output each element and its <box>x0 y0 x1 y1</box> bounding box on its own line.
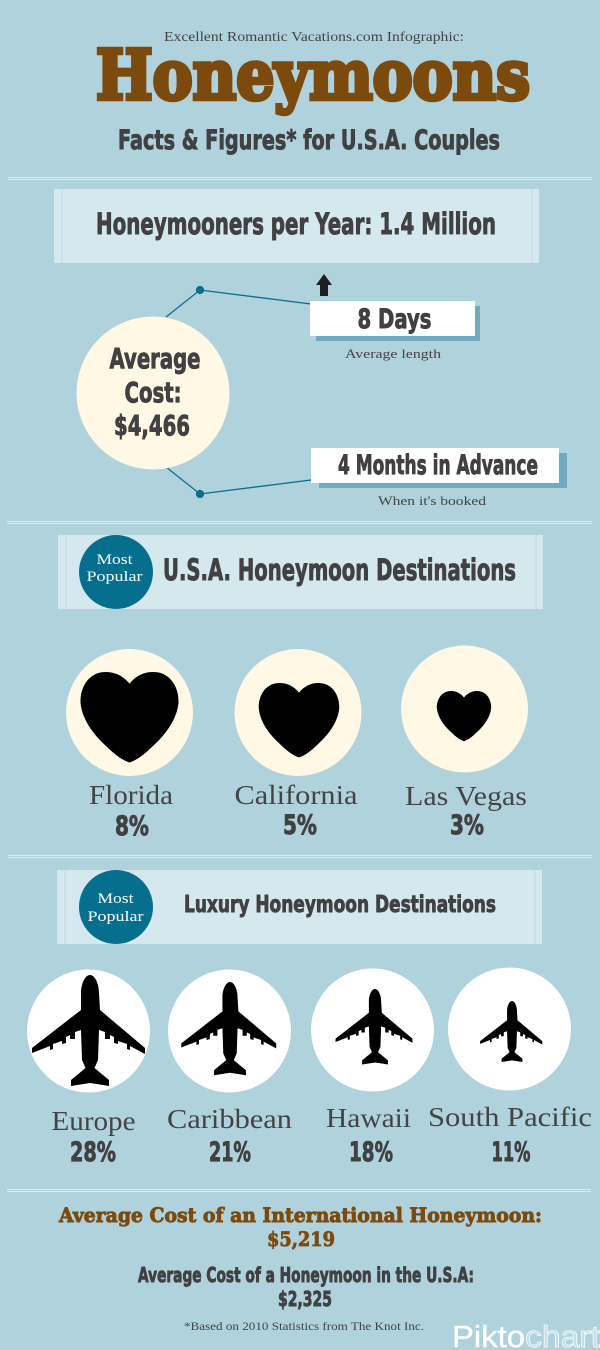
destination: South Pacific: 11% <box>492 1137 530 1168</box>
destination: Europe: Europe <box>52 1106 136 1136</box>
circle: average cost <box>76 316 230 470</box>
badge: most popular: Most <box>96 552 132 568</box>
destination: Florida <box>66 649 193 842</box>
circle: average cost: $4,466 <box>114 409 190 442</box>
international cost <box>58 1203 542 1251</box>
destination: Hawaii: 18% <box>349 1137 393 1168</box>
badge: most popular <box>79 870 153 944</box>
panel: luxury destinations heading <box>57 870 542 944</box>
badge: most popular: Most <box>98 891 134 907</box>
badge: most popular: Popular <box>88 909 144 925</box>
domestic cost <box>138 1263 474 1311</box>
callout: 8 days: Average length <box>345 347 442 361</box>
destination: Florida: 8% <box>115 811 149 842</box>
callout: 8 days: 8 Days <box>358 304 432 335</box>
icon: up arrow <box>316 274 332 296</box>
destination: California: California <box>234 780 358 810</box>
destination: California <box>234 649 362 841</box>
destination: Hawaii <box>311 968 434 1168</box>
international cost: $5,219 <box>267 1227 335 1251</box>
callout: 4 months in advance <box>311 448 567 508</box>
badge: most popular: Popular <box>86 569 143 585</box>
destination: Florida: Florida <box>89 780 173 810</box>
destination: Las Vegas <box>401 646 528 841</box>
international cost: Average Cost of an International Honeymoon: <box>58 1203 542 1227</box>
destination: Hawaii: Hawaii <box>326 1103 411 1133</box>
callout: 4 months in advance: When it's booked <box>378 494 487 508</box>
destination: South Pacific: South Pacific <box>428 1102 592 1132</box>
destination: Las Vegas: Las Vegas <box>405 781 527 811</box>
panel: U.S.A. destinations heading <box>58 535 543 609</box>
diagram: average cost connectors <box>166 286 311 498</box>
destination: Caribbean <box>167 970 293 1168</box>
header <box>96 30 530 156</box>
callout: 8 days <box>310 301 480 361</box>
destination: California: 5% <box>283 810 317 841</box>
domestic cost: $2,325 <box>278 1287 332 1311</box>
circle: average cost: Cost: <box>124 376 182 409</box>
badge: most popular <box>79 535 153 609</box>
footnote: *Based on 2010 Statistics from The Knot Inc. <box>184 1321 424 1333</box>
destination: South Pacific <box>428 968 592 1168</box>
logo: Piktochart <box>452 1319 600 1350</box>
destination: Las Vegas: 3% <box>450 810 484 841</box>
destination: Caribbean: 21% <box>209 1137 251 1168</box>
source line: Excellent Romantic Vacations.com Infographic: <box>164 30 464 45</box>
panel: luxury destinations heading: Luxury Honeymoon Destinations <box>184 892 496 918</box>
title: Honeymoons <box>96 36 530 116</box>
destination: Caribbean: Caribbean <box>167 1104 293 1134</box>
destination: Europe: 28% <box>70 1137 116 1168</box>
destination: Europe <box>27 970 150 1168</box>
circle: average cost: Average <box>110 342 200 375</box>
panel: honeymooners per year <box>54 189 539 263</box>
